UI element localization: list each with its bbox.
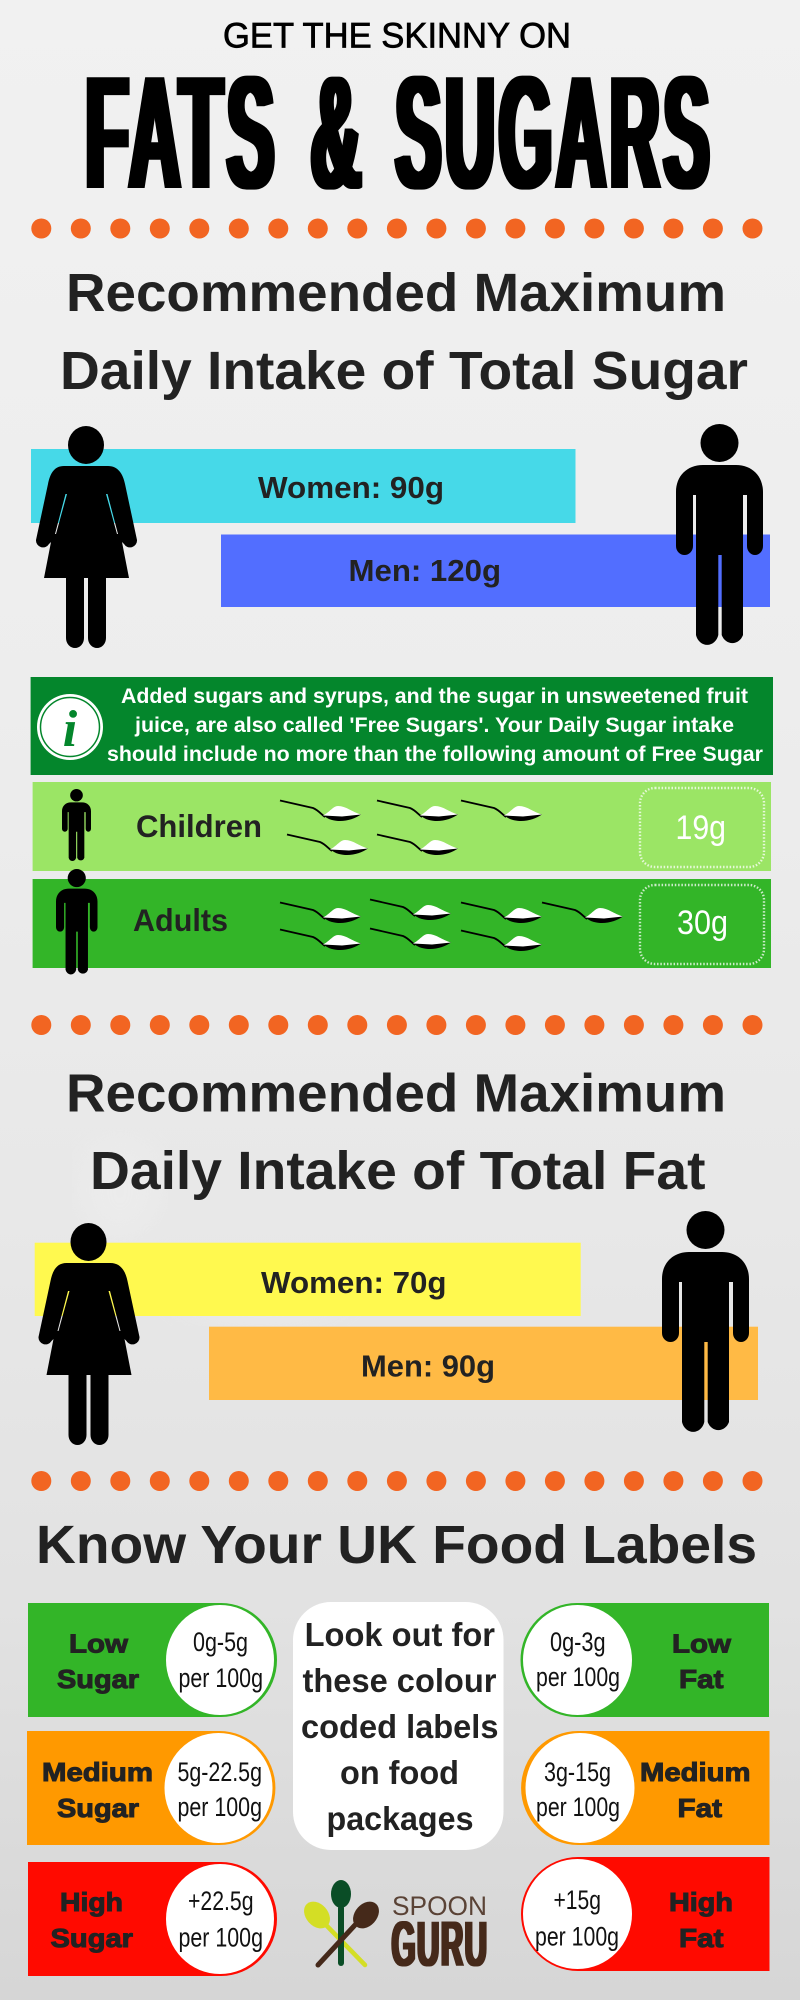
- label: low sugar: per 100g: [178, 1663, 263, 1693]
- label: medium sugar: 5g-22.5g: [178, 1757, 262, 1787]
- label: high sugar: High: [60, 1887, 123, 1917]
- label: medium fat: per 100g: [536, 1792, 620, 1822]
- label: low sugar: 0g-5g: [193, 1627, 248, 1657]
- label: high sugar: [28, 1862, 277, 1976]
- label: low fat: [520, 1603, 769, 1717]
- label: medium fat: Medium: [640, 1757, 750, 1787]
- callout: look out for labels: coded labels: [301, 1708, 498, 1745]
- spoons: children five teaspoons: [280, 800, 542, 855]
- value box: 19g: 19g: [676, 809, 726, 847]
- callout: look out for labels: on food: [340, 1754, 459, 1791]
- icon: child figure: [62, 789, 91, 861]
- bar: men fat 90g: Men: 90g: [361, 1349, 495, 1384]
- row: adults free sugar: [33, 869, 771, 974]
- value box: 30g: [640, 885, 764, 964]
- label: high fat: [521, 1857, 770, 1971]
- info banner: free sugars: juice, are also called 'Free Sugars'. Your Daily Sugar intake: [134, 713, 734, 737]
- row: children free sugar: [33, 782, 771, 871]
- title: fats and sugars: &: [311, 43, 361, 223]
- icon: information: [37, 694, 103, 760]
- label: low fat: per 100g: [536, 1662, 620, 1692]
- label: low sugar: Low: [69, 1629, 129, 1659]
- icon: man figure: [662, 1211, 749, 1432]
- label: high sugar: per 100g: [178, 1922, 263, 1952]
- label: low sugar: Sugar: [57, 1664, 139, 1694]
- label: high sugar: Sugar: [50, 1923, 133, 1953]
- heading: total sugar: Daily Intake of Total Sugar: [60, 341, 748, 401]
- bar: women sugar 90g: [31, 449, 576, 523]
- title: get the skinny on: GET THE SKINNY ON: [223, 16, 571, 56]
- label: high fat: per 100g: [535, 1922, 619, 1952]
- label: low fat: Fat: [679, 1664, 724, 1694]
- row: adults free sugar: Adults: [133, 902, 228, 938]
- label: low sugar: [28, 1603, 277, 1717]
- callout: look out for labels: [293, 1602, 504, 1850]
- bar: men fat 90g: [209, 1327, 758, 1400]
- info banner: free sugars: [31, 677, 773, 775]
- logo: spoon guru: SPOON: [392, 1891, 487, 1921]
- label: high fat: High: [669, 1887, 733, 1917]
- bar: women sugar 90g: Women: 90g: [258, 470, 444, 505]
- label: high sugar: +22.5g: [188, 1886, 254, 1916]
- callout: look out for labels: Look out for: [305, 1616, 495, 1653]
- value box: 30g: 30g: [677, 904, 728, 942]
- label: medium fat: Fat: [678, 1793, 722, 1823]
- icon: crossed spoons: [299, 1880, 384, 1966]
- label: high fat: Fat: [679, 1923, 724, 1953]
- bar: men sugar 120g: [221, 534, 770, 607]
- heading: food labels: Know Your UK Food Labels: [36, 1515, 757, 1575]
- info banner: free sugars: Added sugars and syrups, and the sugar in unsweetened fruit: [121, 684, 748, 708]
- dotted divider 3: [31, 1471, 763, 1491]
- label: low fat: Low: [672, 1629, 732, 1659]
- text: GURU: [392, 1908, 488, 1980]
- label: medium sugar: [27, 1731, 275, 1845]
- logo: spoon guru: [299, 1880, 488, 1980]
- callout: look out for labels: these colour: [302, 1662, 497, 1699]
- icon: woman figure: [36, 426, 137, 648]
- icon: man figure: [676, 424, 763, 645]
- icon: woman figure: [38, 1223, 140, 1445]
- label: medium sugar: Sugar: [57, 1793, 139, 1823]
- row: children free sugar: Children: [136, 808, 262, 844]
- bar: women fat 70g: [35, 1243, 581, 1316]
- label: medium fat: 3g-15g: [544, 1757, 611, 1787]
- title: fats and sugars: FATS: [86, 43, 278, 223]
- label: medium sugar: Medium: [42, 1757, 153, 1787]
- heading: total fat: [66, 1064, 726, 1201]
- bar: men sugar 120g: Men: 120g: [348, 553, 501, 588]
- dotted divider 2: [31, 1015, 763, 1035]
- label: medium fat: [521, 1731, 770, 1845]
- dotted divider 1: [31, 218, 763, 238]
- heading: total sugar: Recommended Maximum: [66, 263, 726, 323]
- label: low fat: 0g-3g: [550, 1627, 606, 1657]
- label: medium sugar: per 100g: [178, 1792, 262, 1822]
- heading: total fat: Recommended Maximum: [66, 1064, 726, 1124]
- value box: 19g: [640, 788, 764, 867]
- title: fats and sugars: [86, 43, 714, 223]
- bar: women fat 70g: Women: 70g: [261, 1265, 446, 1300]
- callout: look out for labels: packages: [326, 1800, 474, 1837]
- icon: adult figure: [56, 869, 98, 974]
- heading: total sugar: [60, 263, 748, 401]
- heading: total fat: Daily Intake of Total Fat: [90, 1141, 706, 1201]
- spoons: adults seven teaspoons: [280, 900, 623, 951]
- label: high fat: +15g: [554, 1885, 601, 1915]
- icon: information: i: [63, 701, 78, 758]
- info banner: free sugars: should include no more than the following amount of Free Sugar: [107, 742, 764, 766]
